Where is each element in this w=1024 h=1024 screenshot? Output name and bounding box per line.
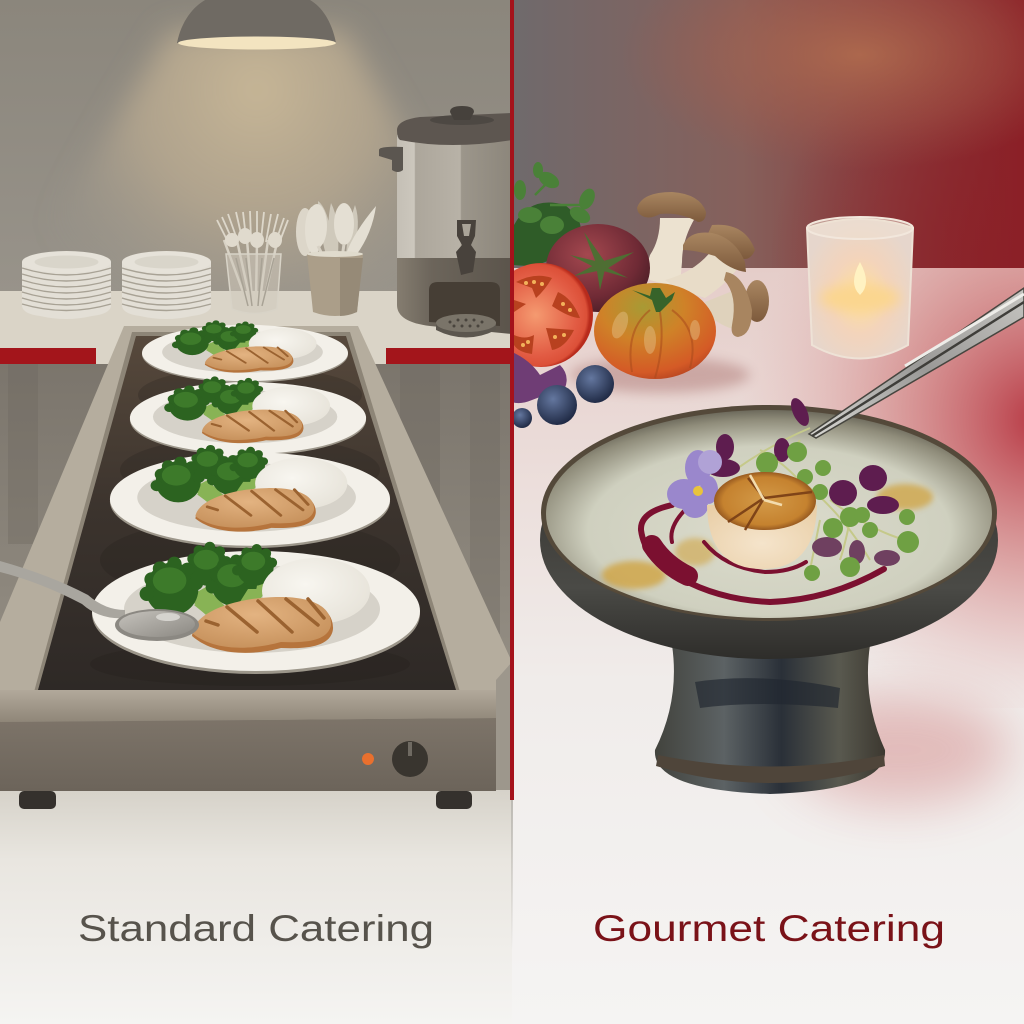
heading: standard catering: Standard Catering	[78, 908, 434, 949]
icon: seared scallop	[707, 472, 817, 569]
red band	[0, 348, 512, 364]
plate 1	[142, 320, 348, 383]
icon: sliced tomato	[514, 263, 593, 367]
heading: gourmet catering: Gourmet Catering	[593, 908, 945, 949]
icon: microgreens	[706, 395, 919, 581]
bowl shadow	[790, 695, 1010, 805]
food shadows	[570, 357, 750, 393]
icon: forks in glass	[217, 211, 288, 314]
floor	[0, 790, 512, 942]
icon: sauce	[641, 505, 884, 602]
icon: ceramic pedestal	[655, 645, 885, 794]
icon: heirloom tomato	[594, 283, 716, 379]
plate 2	[130, 376, 366, 456]
icon: mushrooms	[637, 192, 769, 337]
icon: ceiling lamp	[177, 0, 336, 50]
icon: spoons and knives in cup	[296, 201, 376, 316]
icon: viola flower	[667, 450, 722, 518]
chafing tray	[0, 326, 512, 809]
plate 3	[110, 445, 390, 548]
icon: plate stack 2	[122, 251, 211, 319]
icon: serving spoon	[0, 561, 199, 641]
icon: herbs	[514, 162, 598, 266]
icon: drip tray	[436, 314, 496, 338]
icon: dark tomato	[546, 224, 650, 312]
icon: tweezers	[809, 288, 1024, 438]
light cone	[93, 19, 404, 274]
saffron dust	[602, 484, 933, 589]
lower wall	[0, 364, 510, 722]
icon: beverage urn	[379, 106, 512, 334]
icon: blueberries and shallot	[512, 352, 614, 428]
icon: plate stack 1	[22, 251, 111, 319]
icon: ceramic bowl	[540, 405, 998, 659]
divider	[510, 0, 514, 950]
counter top	[0, 291, 512, 365]
panel: gourmet catering	[514, 0, 1024, 839]
icon: candle	[807, 217, 913, 358]
plate 4	[92, 542, 420, 674]
panel: standard catering	[0, 0, 512, 1024]
plate shadows	[120, 374, 379, 468]
